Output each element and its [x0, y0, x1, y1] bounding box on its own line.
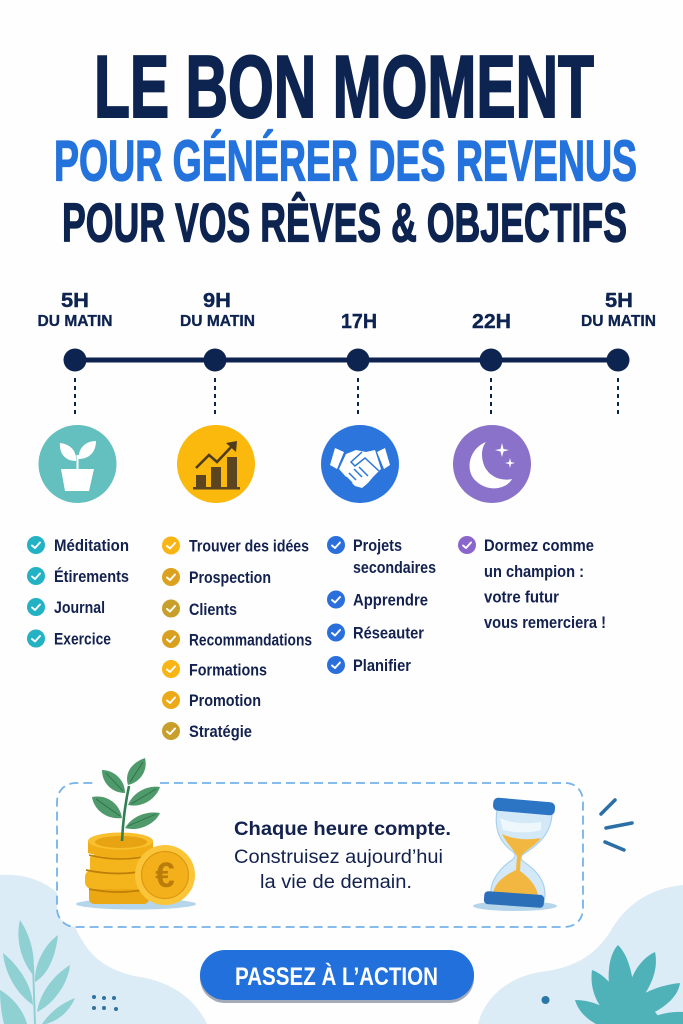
- icon: handshake: [321, 425, 399, 503]
- checklist: morning: Étirements: [54, 567, 129, 586]
- icon: coins with plant: [76, 758, 196, 910]
- checklist: business: Stratégie: [189, 723, 252, 741]
- checklist: night: votre futur: [484, 588, 560, 606]
- checklist: business: Trouver des idées: [189, 538, 309, 556]
- checklist: night: Dormez comme: [484, 537, 594, 555]
- checklist: business: Clients: [189, 601, 237, 619]
- time labels: 5H: [605, 289, 633, 312]
- icon: coins with plant: €: [155, 856, 175, 895]
- checklist: evening: Réseauter: [353, 624, 425, 642]
- checklist: business: Recommandations: [189, 632, 312, 650]
- checklist: night: un champion :: [484, 563, 584, 581]
- background blob: bottom left with leaves and dots: [0, 875, 207, 1024]
- timeline axis with dots: [64, 348, 630, 372]
- checklist: business: Formations: [189, 662, 267, 680]
- callout text: Construisez aujourd’hui: [234, 847, 443, 868]
- time labels: 17H: [341, 310, 377, 333]
- time labels: 22H: [472, 310, 511, 333]
- checklist: evening: Apprendre: [353, 592, 428, 610]
- checklist: evening: Planifier: [353, 657, 412, 675]
- checklist: evening: [327, 536, 436, 675]
- checklist: morning: [27, 536, 129, 648]
- checklist: evening: secondaires: [353, 559, 436, 577]
- icon: growth chart: [177, 425, 255, 503]
- time labels: [38, 289, 656, 333]
- time labels: 9H: [203, 289, 231, 312]
- callout dashed frame: [57, 783, 583, 927]
- icon: plant in pot: [38, 425, 116, 503]
- callout text: [234, 819, 451, 893]
- checklist: night: [458, 536, 606, 632]
- call-to-action button: PASSEZ À L’ACTION: [235, 962, 438, 991]
- checklist: morning: Exercice: [54, 630, 111, 648]
- checklist: night: vous remerciera !: [484, 614, 606, 632]
- time labels: DU MATIN: [38, 313, 112, 330]
- icon: moon and stars: [453, 425, 531, 503]
- callout text: la vie de demain.: [260, 872, 412, 893]
- checklist: evening: Projets: [353, 537, 402, 555]
- checklist: business: [162, 536, 312, 741]
- checklist: morning: Méditation: [54, 537, 129, 555]
- callout text: Chaque heure compte.: [234, 819, 451, 840]
- checklist: morning: Journal: [54, 599, 105, 617]
- checklist: business: Prospection: [189, 569, 271, 587]
- title: [54, 37, 637, 254]
- icon: burst lines: [601, 800, 632, 850]
- callout panel: [57, 758, 632, 927]
- background blob: bottom right with plant: [478, 885, 683, 1024]
- time labels: 5H: [61, 289, 89, 312]
- icon: hourglass: [473, 797, 557, 911]
- time labels: DU MATIN: [581, 313, 656, 330]
- call-to-action button: [200, 950, 474, 1003]
- timeline: [38, 289, 656, 414]
- time labels: DU MATIN: [180, 313, 255, 330]
- checklist: business: Promotion: [189, 692, 261, 710]
